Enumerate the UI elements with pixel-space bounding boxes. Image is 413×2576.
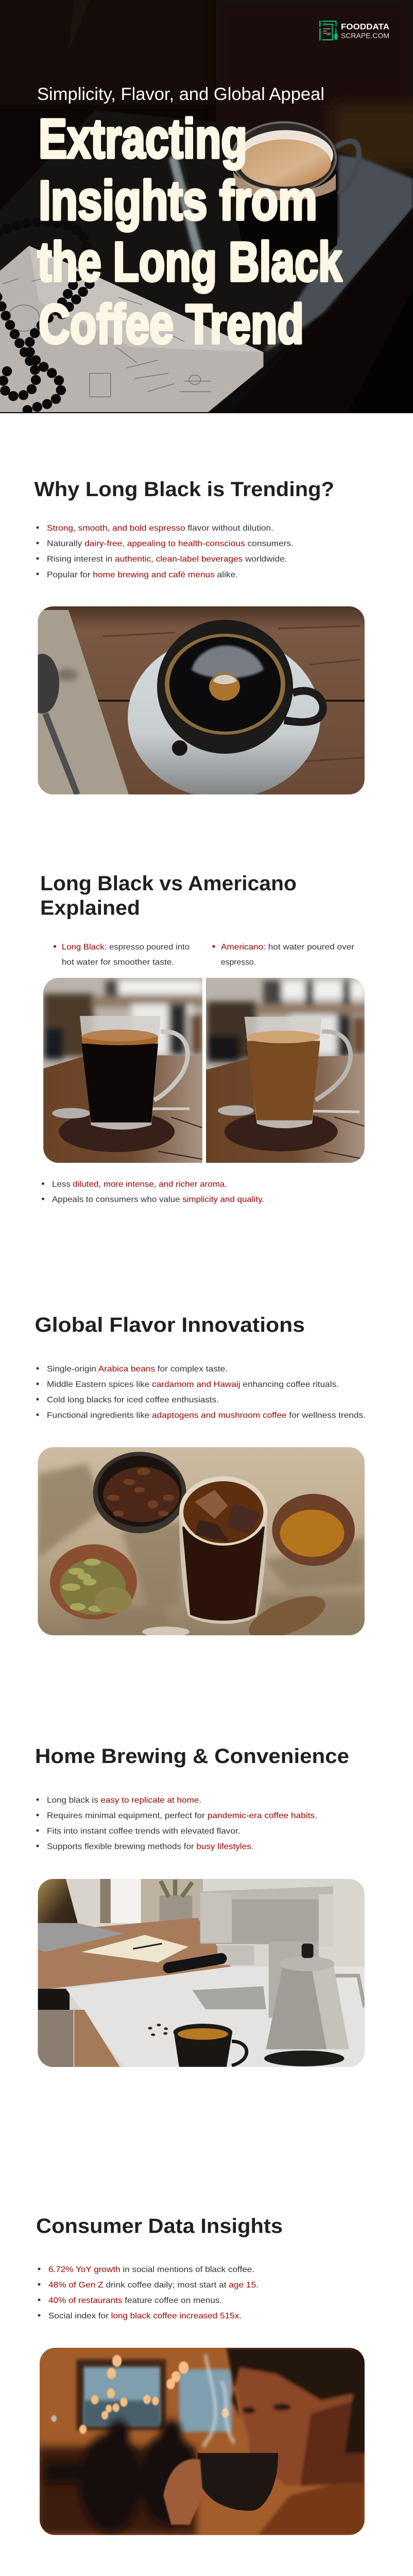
title: Extracting [39, 107, 247, 170]
bullet list: Fits into instant coffee trends with elevated flavor. [47, 1827, 240, 1836]
heading: Explained [40, 896, 140, 919]
panel: long black vs americano [40, 872, 365, 1204]
bullet list: Cold long blacks for iced coffee enthusiasts. [47, 1396, 219, 1404]
comparison: long black definition: hot water for smoother taste. [62, 958, 174, 967]
bullet list: Strong, smooth, and bold espresso flavor without dilution. [47, 524, 273, 533]
bullet list: 6.72% YoY growth in social mentions of black coffee. [48, 2265, 254, 2274]
bullet list: 40% of restaurants feature coffee on menus. [48, 2296, 222, 2305]
bullet list: 48% of Gen Z drink coffee daily; most start at age 15. [48, 2281, 259, 2290]
comparison: long black definition [54, 943, 190, 967]
bullet list: Supports flexible brewing methods for busy lifestyles. [47, 1842, 254, 1851]
logo: FoodData Scrape top right: SCRAPE.COM [341, 31, 389, 40]
heading: Consumer Data Insights [36, 2215, 283, 2238]
logo: FoodData Scrape top right [319, 21, 389, 40]
panel: why long black is trending [34, 478, 365, 794]
bullet list: Long black is easy to replicate at home. [47, 1796, 201, 1805]
bullet list: Popular for home brewing and café menus alike. [47, 571, 238, 579]
panel: global flavor innovations [35, 1314, 366, 1635]
bullet list [42, 1180, 264, 1204]
comparison: americano definition: Americano: hot water poured over [221, 943, 355, 952]
subtitle: Simplicity, Flavor, and Global Appeal [37, 84, 324, 104]
photo: americano in glass mug [205, 976, 366, 1164]
bullet list [36, 1365, 366, 1420]
photo: iced coffee with spice bowls [37, 1447, 366, 1647]
heading: Why Long Black is Trending? [34, 478, 334, 501]
comparison: long black definition: Long Black: espresso poured into [62, 943, 190, 952]
photo: young man sipping coffee in a cafe [38, 2346, 366, 2537]
panel: hero [0, 0, 413, 413]
bullet list [38, 2265, 259, 2320]
title [38, 107, 342, 355]
panel: home brewing and convenience [35, 1745, 365, 2067]
bullet list: Rising interest in authentic, clean-label beverages worldwide. [47, 555, 287, 564]
bullet list: Appeals to consumers who value simplicity and quality. [52, 1195, 264, 1204]
photo: home espresso machine and kettle [37, 1878, 366, 2067]
bullet list: Requires minimal equipment, perfect for pandemic-era coffee habits. [47, 1811, 317, 1820]
heading: Long Black vs Americano [40, 872, 297, 895]
bullet list: Functional ingredients like adaptogens and mushroom coffee for wellness trends. [47, 1411, 366, 1420]
bullet list [36, 1796, 317, 1851]
heading [40, 872, 297, 919]
bullet list: Middle Eastern spices like cardamom and Hawaij enhancing coffee rituals. [47, 1380, 339, 1389]
photo: black coffee on saucer [25, 606, 366, 799]
logo: FoodData Scrape top right: FOODDATA [341, 23, 389, 31]
heading: Home Brewing & Convenience [35, 1745, 349, 1768]
bullet list: Less diluted, more intense, and richer aroma. [52, 1180, 227, 1189]
bullet list [36, 524, 294, 579]
comparison: americano definition: espresso. [221, 958, 256, 967]
bullet list: Naturally dairy-free, appealing to health-conscious consumers. [47, 539, 294, 548]
bullet list: Single-origin Arabica beans for complex taste. [47, 1365, 228, 1374]
comparison: americano definition [212, 943, 355, 967]
heading: Global Flavor Innovations [35, 1314, 305, 1336]
photo: long black in glass mug [42, 976, 203, 1164]
title: Insights from [39, 169, 317, 231]
panel: consumer data insights [36, 2215, 365, 2535]
bullet list: Social index for long black coffee increased 515x. [48, 2312, 242, 2320]
title: Coffee Trend [39, 293, 304, 355]
hero photo: coffee cup and notebook on a dark table [0, 0, 413, 413]
